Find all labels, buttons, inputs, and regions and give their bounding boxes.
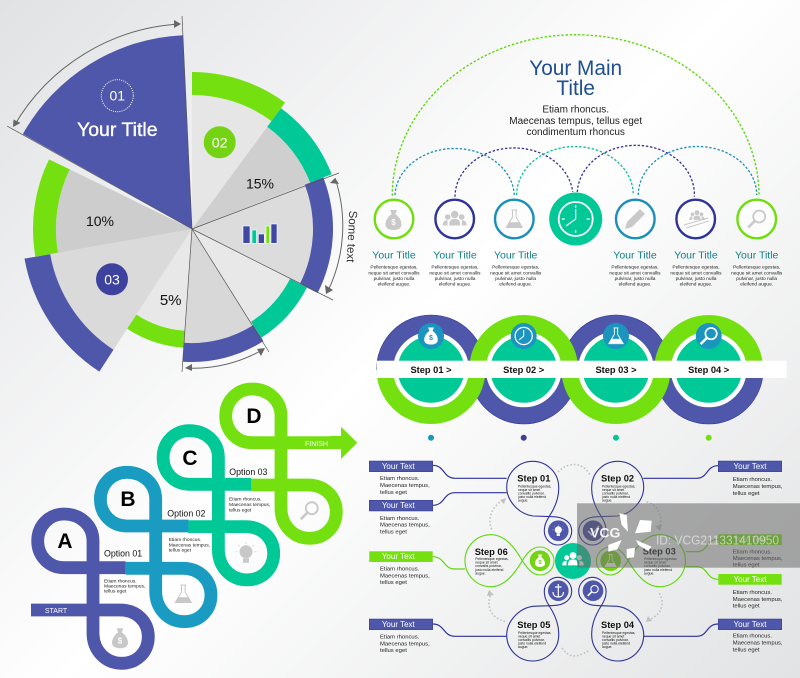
option 02 text: Maecenas tempus, <box>169 542 210 548</box>
watermark id: ID: VCG211331410950 <box>656 533 779 547</box>
item text 2: Your Title <box>433 249 477 261</box>
step 06 teardrop <box>465 535 554 587</box>
option 01 text <box>104 549 145 595</box>
white band <box>377 361 787 378</box>
option 01 text: Maecenas tempus, <box>104 584 145 590</box>
callout left 2 <box>369 500 433 535</box>
item text 5: neque sit amet convallis <box>670 270 722 276</box>
option 02 text <box>167 509 210 554</box>
watermark logo petals <box>608 513 652 558</box>
step 04 text: convallis pulvinar, <box>602 638 629 642</box>
item text 6: neque sit amet convallis <box>731 270 783 276</box>
subtitle: Etiam rhoncus. <box>542 105 609 116</box>
icon: pencil ring <box>616 200 655 238</box>
step 04 text: Pellentesque egestas, <box>602 631 635 635</box>
arrow: top left arc <box>13 20 181 127</box>
step 05 text: justo nulla eleifend <box>517 642 546 646</box>
letter A: A <box>57 530 73 553</box>
step 01 text: augue. <box>518 499 528 503</box>
callout left 4: Etiam rhoncus. <box>380 634 420 640</box>
icon: money bag: $ <box>118 636 123 646</box>
step 05 text: convallis pulvinar, <box>518 638 545 642</box>
callout right 2 green: Your Text <box>734 535 767 544</box>
heading: Your Title: Your Title <box>77 119 158 141</box>
callout left 2: tellus eget <box>380 529 407 535</box>
step 05 text: Pellentesque egestas, <box>518 631 551 635</box>
step 01 icon: $ <box>429 335 433 342</box>
step 03 teardrop <box>596 535 685 587</box>
item text 3: pulvinar, justo nulla <box>495 276 536 282</box>
icon: anchor node <box>548 580 569 601</box>
badge 01 <box>101 80 133 112</box>
callout left 2: Maecenas tempus, <box>380 523 430 529</box>
wedge 10 percent <box>56 169 192 253</box>
icon: bar chart <box>243 224 277 243</box>
icon: money bag ring <box>375 200 413 238</box>
icon: magnifier ring <box>737 200 776 238</box>
item text 4: Pellentesque egestas, <box>611 264 659 270</box>
callout left 4: Your Text <box>382 620 416 629</box>
item text 2: Pellentesque egestas, <box>431 264 479 270</box>
step labels: Step 04 > <box>688 365 730 375</box>
step 02 text <box>601 474 635 503</box>
label 10 percent: 10% <box>86 213 114 229</box>
step 03 text: convallis pulvinar, <box>644 564 671 568</box>
item text 4: eleifend augue. <box>619 282 651 288</box>
ring halves <box>376 315 763 424</box>
option 02 text: Etiam rhoncus. <box>169 537 201 543</box>
wedge bottom <box>184 229 253 343</box>
callout right 4: tellus eget <box>733 647 760 653</box>
connectors left <box>433 465 507 636</box>
step 02 teardrop <box>579 461 644 545</box>
callout right 3 green <box>718 574 783 610</box>
option 01 text: tellus eget <box>104 589 127 595</box>
watermark VCG: VCG <box>590 524 620 540</box>
item text 6: Your Title <box>735 249 779 261</box>
subtitle: condimentum rhoncus <box>527 127 625 138</box>
label 15 percent: 15% <box>246 175 274 191</box>
option 03 text: Option 03 <box>229 467 268 477</box>
step 01 text: Step 01 <box>517 474 550 484</box>
badge 03 <box>96 263 128 295</box>
panel: four step rings <box>376 315 787 441</box>
label 5 percent: 5% <box>160 292 182 309</box>
callout right 1 <box>718 461 783 497</box>
callout right 4 <box>718 619 783 653</box>
main title: Your Main <box>529 57 622 80</box>
icon: flask ring <box>495 200 534 238</box>
big green dotted arch <box>392 35 759 196</box>
item text 2: eleifend augue. <box>439 282 471 288</box>
loop A indigo <box>31 514 148 663</box>
item text 5: eleifend augue. <box>680 282 712 288</box>
step 02 text: Pellentesque egestas, <box>602 484 635 488</box>
callout right 3 green: Your Text <box>734 575 767 584</box>
callout right 3 green: Etiam rhoncus. <box>733 590 772 596</box>
item text 1 <box>368 249 420 288</box>
icon: money bag ring: $ <box>391 218 396 227</box>
callout left 4: Maecenas tempus, <box>380 641 430 647</box>
icon: bulb node <box>548 520 569 541</box>
badge 02 <box>204 126 236 158</box>
item text 3: eleifend augue. <box>499 282 532 288</box>
step 03 text <box>643 546 677 575</box>
step 04 text: augue. <box>602 645 612 649</box>
item text 5: Your Title <box>674 249 718 261</box>
callout right 1: tellus eget <box>733 491 760 497</box>
callout right 1: Your Text <box>734 462 767 471</box>
dotted cycle arrows <box>487 464 662 656</box>
step 04 text: Step 04 <box>601 620 635 630</box>
step 01 text: justo nulla eleifend <box>517 495 546 499</box>
option 02 text: Option 02 <box>167 509 206 519</box>
watermark band <box>577 503 800 568</box>
item text 4: pulvinar, justo nulla <box>615 276 656 282</box>
callout right 2 green: Etiam rhoncus. <box>733 549 772 555</box>
step 02 icon <box>511 323 537 349</box>
step 01 text: convallis pulvinar, <box>518 492 545 496</box>
item text 2: pulvinar, justo nulla <box>435 276 476 282</box>
ring segment teal lower right <box>251 279 307 338</box>
callout right 4: Your Text <box>734 620 767 629</box>
item text 6: pulvinar, justo nulla <box>736 276 777 282</box>
item text 1: eleifend augue. <box>378 282 410 288</box>
label FINISH: FINISH <box>305 441 328 448</box>
callout left 3 green: tellus eget <box>380 580 407 586</box>
step 02 text: neque sit amet <box>602 488 624 492</box>
step 03 text: justo nulla eleifend <box>643 568 672 572</box>
inner discs <box>396 334 744 405</box>
radial divider lines <box>7 16 339 372</box>
icon: central people <box>555 543 591 579</box>
step labels: Step 03 > <box>595 365 637 375</box>
option 03 text: tellus eget <box>229 507 252 513</box>
item text 1: neque sit amet convallis <box>368 270 420 276</box>
step labels <box>410 365 730 375</box>
wedge 01: Your Title <box>23 35 192 229</box>
option 03 text <box>229 467 270 513</box>
item text 6 <box>731 249 783 288</box>
step 05 text: neque sit amet <box>518 634 540 638</box>
step labels: Step 02 > <box>503 365 545 375</box>
callout right 2 green: Maecenas tempus, <box>733 556 783 562</box>
small dotted arches <box>395 145 757 197</box>
callout left 2: Etiam rhoncus. <box>380 516 420 522</box>
wedge 5 percent <box>136 229 192 331</box>
item text 2: neque sit amet convallis <box>429 270 481 276</box>
callout right 4: Etiam rhoncus. <box>733 634 772 640</box>
item text 4 <box>609 249 661 288</box>
step 03 text: Step 03 <box>643 546 676 556</box>
callout right 2 green: tellus eget <box>733 563 760 569</box>
step 04 text: neque sit amet <box>602 634 624 638</box>
callout left 1: tellus eget <box>380 490 407 496</box>
step 06 text: Pellentesque egestas, <box>475 557 509 561</box>
callout right 1: Etiam rhoncus. <box>733 477 772 483</box>
letter B: B <box>120 488 136 511</box>
panel: six step cycle <box>369 461 783 661</box>
step 06 text: augue. <box>475 571 486 575</box>
step 02 text: Step 02 <box>601 474 634 484</box>
step 05 teardrop <box>507 577 572 661</box>
step 06 text: convallis pulvinar, <box>475 564 502 568</box>
step 01 text: neque sit amet <box>518 488 540 492</box>
step 01 teardrop <box>507 461 572 545</box>
item text 4: neque sit amet convallis <box>609 270 661 276</box>
icon: people ring <box>435 200 474 238</box>
subtitle <box>509 105 642 138</box>
loop B blue <box>100 472 211 622</box>
icon: magnifier node <box>583 580 603 601</box>
label: Some text: Some text <box>344 210 358 263</box>
callout left 1: Your Text <box>382 462 416 471</box>
ring segment blue bottom <box>183 325 263 362</box>
step 04 text: justo nulla eleifend <box>601 642 630 646</box>
label START: START <box>45 608 68 615</box>
item text 6: eleifend augue. <box>740 282 773 288</box>
callout left 2: Your Text <box>382 501 416 510</box>
ring segment blue right <box>300 178 333 293</box>
subtitle: Maecenas tempus, tellus eget <box>509 116 642 127</box>
badge 01: 01 <box>110 88 125 104</box>
icon: bag node: $ <box>538 560 542 566</box>
ring segment green left <box>33 159 70 257</box>
ring segment green top <box>192 72 285 121</box>
arrow: finish <box>330 427 357 459</box>
item text 3: Pellentesque egestas, <box>492 264 539 270</box>
option 02 text: tellus eget <box>169 548 192 554</box>
step 05 text <box>517 620 551 649</box>
item text 1: Your Title <box>372 249 416 261</box>
loop D green <box>226 389 342 538</box>
step 06 text: neque sit amet <box>475 561 498 565</box>
pie chart panel <box>7 16 358 372</box>
callout left 4: tellus eget <box>380 648 407 654</box>
icon: clock <box>549 192 602 246</box>
icon: magnifier <box>301 502 318 519</box>
step 05 text: Step 05 <box>517 620 550 630</box>
step 01 text <box>517 474 551 503</box>
step 04 icon <box>696 323 722 349</box>
callout left 1: Etiam rhoncus. <box>380 476 420 482</box>
panel: main title with arches <box>368 35 783 287</box>
letter C: C <box>182 447 198 470</box>
option 01 text: Option 01 <box>104 549 142 559</box>
callout right 4: Maecenas tempus, <box>733 641 783 647</box>
item text 5 <box>670 249 722 288</box>
item text 3 <box>490 249 542 288</box>
step 06 text <box>474 547 509 575</box>
callout left 1 <box>369 461 433 496</box>
step 06 text: justo nulla eleifend <box>474 568 504 572</box>
step 06 text: Step 06 <box>475 547 508 557</box>
letter D: D <box>246 405 262 428</box>
ring segment green bottom <box>127 315 185 348</box>
callout left 3 green: Your Text <box>382 552 416 561</box>
callout left 3 green: Maecenas tempus, <box>380 573 430 579</box>
arrow: right arc <box>325 178 343 294</box>
step 01 text: Pellentesque egestas, <box>518 484 551 488</box>
badge 02: 02 <box>212 134 228 150</box>
callout right 3 green: tellus eget <box>733 604 760 610</box>
marker dots <box>428 435 712 441</box>
option 03 text: Maecenas tempus, <box>229 502 270 508</box>
item text 6: Pellentesque egestas, <box>733 264 780 270</box>
callout left 3 green <box>369 551 433 586</box>
loop C teal <box>163 431 274 580</box>
callout left 3 green: Etiam rhoncus. <box>380 566 420 572</box>
item text 1: Pellentesque egestas, <box>370 264 418 270</box>
callout right 3 green: Maecenas tempus, <box>733 597 783 603</box>
step 03 text: augue. <box>644 571 654 575</box>
icon: flask node <box>600 550 621 571</box>
callout right 1: Maecenas tempus, <box>733 484 783 490</box>
callout right 2 green <box>718 534 783 569</box>
wedge 03 <box>50 229 192 350</box>
item text 2 <box>429 249 481 288</box>
ring segment blue lower left <box>24 254 114 372</box>
wedge bar icon <box>192 185 313 284</box>
icon: audience ring <box>676 200 715 238</box>
step 03 text: Pellentesque egestas, <box>644 557 677 561</box>
wedge lower right <box>192 229 290 322</box>
option 03 text: Etiam rhoncus. <box>229 497 262 503</box>
callout left 1: Maecenas tempus, <box>380 483 430 489</box>
item text 3: Your Title <box>494 249 538 261</box>
callout left 4 <box>369 619 433 654</box>
step 04 teardrop <box>579 577 644 661</box>
step 03 text: neque sit amet <box>644 561 666 565</box>
step 04 text <box>601 620 635 649</box>
icon: check node <box>583 520 603 541</box>
ring segment teal upper right <box>267 108 332 183</box>
step 02 text: augue. <box>602 499 612 503</box>
wedge 15 percent <box>192 127 310 229</box>
item text 3: neque sit amet convallis <box>490 270 542 276</box>
main title: Title <box>556 77 595 100</box>
option 01 text: Etiam rhoncus. <box>104 578 137 584</box>
wedge 02 <box>192 95 272 229</box>
badge 03: 03 <box>104 271 120 287</box>
step labels: Step 01 > <box>410 365 452 375</box>
item text 4: Your Title <box>613 249 657 261</box>
icon: bag node <box>530 550 550 571</box>
step 02 text: justo nulla eleifend <box>601 495 630 499</box>
arrow: bottom arc <box>185 348 265 371</box>
icon: bulb <box>236 542 256 563</box>
main title <box>529 57 622 100</box>
icon: flask <box>175 585 191 602</box>
icon: money bag <box>112 628 128 648</box>
item text 5: pulvinar, justo nulla <box>676 276 717 282</box>
step 03 icon <box>603 323 629 349</box>
step 01 icon <box>418 323 444 349</box>
item text 5: Pellentesque egestas, <box>672 264 720 270</box>
step 05 text: augue. <box>518 645 528 649</box>
item text 1: pulvinar, justo nulla <box>374 276 415 282</box>
step 02 text: convallis pulvinar, <box>602 492 629 496</box>
connectors right <box>643 466 718 636</box>
panel: A to D looped path <box>31 389 357 663</box>
